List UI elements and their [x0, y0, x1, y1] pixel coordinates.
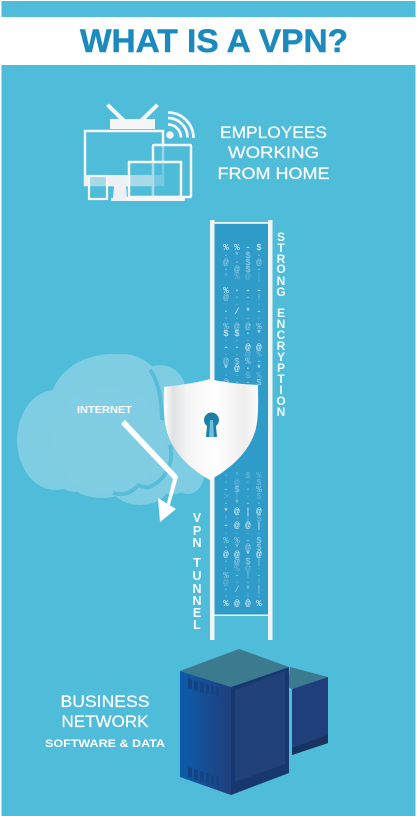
shield with keyhole — [164, 379, 258, 480]
encrypted characters: ·*$· — [223, 251, 262, 261]
arrow: internet path deflected — [121, 420, 178, 522]
tablet — [153, 145, 191, 197]
encrypted characters: @·-$ — [223, 378, 262, 388]
encrypted characters: %·-- — [223, 286, 262, 296]
encrypted characters: $$·* — [223, 329, 262, 339]
encrypted characters: ·-$% — [223, 371, 262, 381]
business network heading — [45, 693, 165, 750]
business network heading: BUSINESS — [60, 693, 150, 711]
icon: home devices with router and wifi — [84, 104, 194, 201]
business network heading: NETWORK — [62, 713, 148, 731]
encrypted characters: ·%@· — [223, 564, 262, 574]
small server — [288, 667, 328, 755]
encrypted characters: %@@% — [223, 599, 262, 609]
label: VPN tunnel: VPNTUNNEL — [192, 511, 202, 632]
encrypted characters: ·@$- — [223, 265, 262, 275]
router — [106, 104, 159, 129]
encrypted characters: ·-·- — [223, 529, 262, 539]
encrypted characters: %%-$ — [223, 243, 262, 253]
icon: servers — [180, 649, 328, 795]
encrypted characters: @$%- — [223, 357, 262, 367]
encrypted characters: ··@% — [223, 350, 262, 360]
keyhole — [204, 412, 219, 437]
monitor — [84, 131, 164, 201]
title: WHAT IS A VPN? — [80, 23, 348, 59]
heading: employees working from home: FROM HOME — [218, 165, 330, 183]
subheading: SOFTWARE & DATA — [45, 738, 165, 750]
wifi signal — [166, 112, 194, 139]
encrypted characters: ·@·$ — [223, 478, 262, 488]
title banner — [2, 17, 416, 65]
encrypted characters: -$·% — [223, 485, 262, 495]
encrypted characters: -·@@ — [223, 343, 262, 353]
tunnel rails — [210, 220, 272, 640]
encrypted characters: >|·$ — [223, 492, 262, 502]
encrypted characters: %-!- — [223, 571, 262, 581]
vents — [188, 678, 219, 786]
encrypted characters: %@@% — [223, 322, 262, 332]
phone — [89, 176, 107, 199]
heading: employees working from home: EMPLOYEES — [220, 124, 327, 142]
encrypted characters: @·$@ — [223, 258, 262, 268]
cloud inner shading — [113, 370, 171, 494]
encrypted characters: ·/*- — [223, 307, 262, 317]
heading: employees working from home — [218, 124, 330, 183]
encrypted characters: %%-$ — [223, 536, 262, 546]
encrypted characters: ·/*| — [223, 585, 262, 595]
encrypted characters: ·--· — [223, 336, 262, 346]
encrypted characters: *@|@ — [223, 507, 262, 517]
encrypted characters: ·@$| — [223, 557, 262, 567]
encrypted characters: ·*-· — [223, 499, 262, 509]
laptop — [126, 162, 185, 201]
encrypted characters: *@·* — [223, 364, 262, 374]
encrypted characters: ·*$% — [223, 471, 262, 481]
encrypted characters: !·|$ — [223, 514, 262, 524]
large server — [180, 649, 289, 795]
encrypted characters — [223, 243, 262, 609]
encrypted characters: @·-! — [223, 293, 262, 303]
label: strong encryption: STRONGENCRYPTION — [276, 230, 286, 419]
tunnel interior — [214, 223, 268, 616]
heading: employees working from home: WORKING — [228, 144, 319, 162]
encrypted characters: @@*@ — [223, 550, 262, 560]
encrypted characters: ·*@$ — [223, 543, 262, 553]
encrypted characters: @·-| — [223, 578, 262, 588]
encrypted characters: *%@| — [223, 272, 262, 282]
encrypted characters: ·-·· — [223, 300, 262, 310]
VPN tunnel — [210, 220, 272, 640]
encrypted characters: ··-· — [223, 314, 262, 324]
encrypted characters: ·-|- — [223, 592, 262, 602]
cloud — [17, 354, 205, 505]
label: internet: INTERNET — [77, 404, 133, 416]
encrypted characters: -@@| — [223, 521, 262, 531]
